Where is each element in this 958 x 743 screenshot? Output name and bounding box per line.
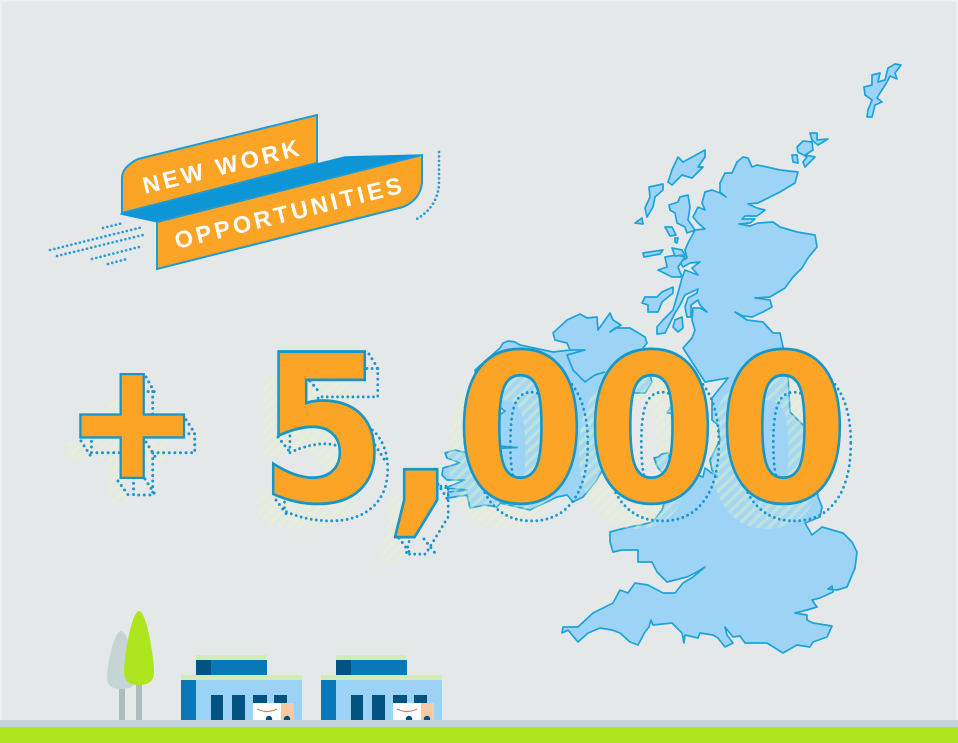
map: Outer Hebrides — [635, 150, 705, 224]
truck — [393, 703, 434, 722]
dotted shadow of the number: 5 — [270, 328, 401, 567]
plus sign fill: + — [66, 330, 198, 514]
map: Tiree — [643, 250, 663, 257]
map: Arran — [673, 317, 683, 332]
banner text: opportunities: OPPORTUNITIES — [172, 172, 404, 254]
hatched shadow of the number: 0 — [702, 336, 833, 575]
hatched shadow of the number: 0 — [570, 336, 701, 575]
hatched shadow of the number: , — [368, 343, 439, 582]
digit 0: 0 — [586, 311, 717, 550]
banner: new work opportunities — [121, 115, 422, 269]
banner fold — [121, 155, 422, 222]
truck — [253, 703, 294, 722]
hatched shadow of the number: + — [49, 350, 187, 542]
dotted shadow of the number: 0 — [729, 328, 860, 567]
map: Skye — [669, 195, 695, 233]
road — [0, 720, 958, 727]
dotted extrusion connectors — [81, 354, 448, 553]
banner upper strip — [122, 115, 317, 213]
hatched shadow of the number — [49, 336, 833, 582]
map: Islay and Jura — [642, 287, 673, 312]
map: Ireland — [442, 313, 655, 510]
dotted shadow of the number: 0 — [597, 328, 728, 567]
map: Shetland — [864, 64, 901, 117]
comma: , — [385, 318, 456, 557]
hatched shadow of the number: 5 — [243, 336, 374, 575]
hatched shadow of the number: 0 — [439, 336, 570, 575]
plus sign outline: + — [66, 330, 198, 514]
map: Northern Ireland border — [567, 350, 605, 382]
map: UK and Ireland — [442, 64, 901, 653]
digit 5: 5 — [259, 311, 387, 549]
digit 0: 0 — [455, 311, 586, 550]
warehouse 2 — [321, 655, 442, 722]
dotted shadow of the number: 0 — [466, 328, 597, 567]
dotted speed lines — [50, 152, 439, 264]
map: Isle of Man — [667, 405, 680, 414]
grass — [0, 727, 958, 743]
big number: + 5,000 — [66, 311, 849, 557]
map: Mull — [658, 255, 685, 277]
map: small inner isles — [665, 227, 685, 256]
dotted shadow of the number: , — [396, 335, 467, 574]
warehouse 1 — [181, 655, 302, 722]
digit 0: 0 — [718, 311, 849, 550]
banner lower strip — [157, 155, 422, 269]
tree: grey — [107, 631, 136, 720]
map: Orkney — [792, 133, 828, 167]
dotted shadow of the number: + — [74, 342, 212, 534]
tree: green — [124, 611, 154, 720]
map: Anglesey — [654, 453, 672, 475]
banner text: new work: NEW WORK — [140, 135, 301, 199]
dotted shadow of the number — [74, 328, 860, 574]
map: Great Britain mainland — [562, 157, 857, 653]
